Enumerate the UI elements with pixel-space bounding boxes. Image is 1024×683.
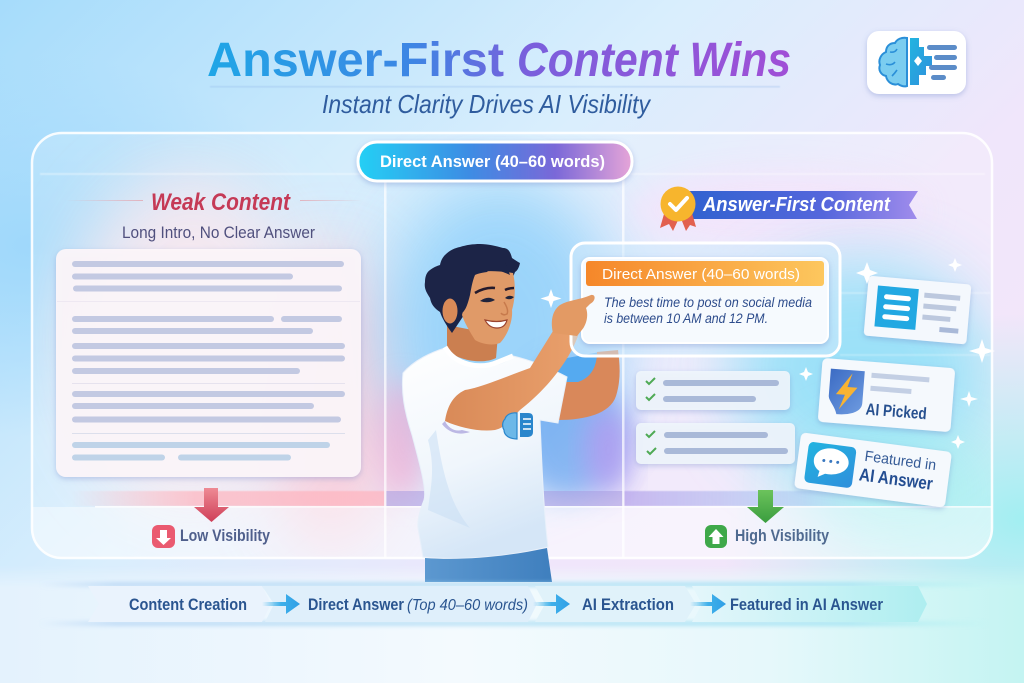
card: featured in AI answer: AI Answer	[858, 464, 934, 494]
arrow one	[262, 594, 300, 614]
shirt logo	[503, 413, 533, 439]
label: high visibility: High Visibility	[735, 526, 829, 545]
icon: high visibility	[705, 525, 727, 548]
direct answer card header: Direct Answer (40–60 words)	[602, 266, 800, 283]
panel: comparison frame	[32, 133, 992, 558]
arrow two	[533, 594, 570, 614]
checklist card two	[636, 423, 795, 464]
title: Content Wins	[517, 34, 791, 87]
direct answer card header	[586, 261, 824, 286]
heading rule left	[65, 200, 143, 201]
step: direct answer: (Top 40–60 words)	[407, 597, 528, 614]
ear	[442, 298, 458, 324]
shirt	[402, 348, 567, 558]
near arm	[445, 331, 579, 431]
heading rule right	[300, 200, 362, 201]
chevrons	[88, 586, 927, 622]
nose	[501, 302, 508, 315]
shirt sleeve shadow	[442, 421, 470, 434]
pill: direct answer	[358, 142, 632, 181]
arrow three	[690, 594, 726, 614]
direct answer text: The best time to post on social media	[604, 295, 812, 310]
step: direct answer: Direct Answer	[308, 595, 404, 614]
card behind hand	[571, 243, 840, 356]
hand	[552, 295, 595, 336]
title: Answer-First	[207, 34, 504, 87]
label: low visibility: Low Visibility	[180, 526, 270, 545]
direct answer text: is between 10 AM and 12 PM.	[604, 311, 768, 326]
title underline	[210, 86, 780, 88]
panel: answer-first content	[540, 186, 995, 548]
eyebrows and eyes	[475, 288, 514, 302]
document card	[56, 249, 361, 477]
document card	[864, 276, 971, 344]
hair	[425, 244, 520, 333]
fringe	[458, 262, 510, 313]
heading: weak content: Weak Content	[151, 189, 291, 216]
jeans	[425, 548, 552, 582]
process flow	[40, 583, 990, 625]
far arm	[558, 350, 620, 420]
ribbon banner: Answer-First Content	[702, 194, 891, 216]
title	[207, 34, 791, 87]
subtitle: Instant Clarity Drives AI Visibility	[322, 89, 652, 119]
pill: direct answer: Direct Answer (40–60 words)	[380, 152, 605, 171]
arrow: down red	[194, 488, 229, 522]
card: AI picked	[818, 358, 955, 432]
icon: brain and document logo	[867, 31, 966, 94]
step: AI extraction: AI Extraction	[582, 595, 674, 614]
neck	[447, 325, 498, 361]
collar	[445, 347, 513, 366]
subheading: long intro: Long Intro, No Clear Answer	[122, 224, 315, 242]
step: direct answer	[308, 595, 528, 614]
ribbon banner	[660, 186, 918, 231]
person pointing	[402, 243, 840, 582]
sparkles	[540, 258, 995, 449]
card: featured in AI answer	[794, 432, 952, 508]
panel: weak content	[56, 189, 362, 548]
card: featured in AI answer: Featured in	[864, 448, 937, 474]
head	[462, 271, 515, 344]
icon: low visibility	[152, 525, 175, 548]
step: featured: Featured in AI Answer	[730, 595, 883, 614]
checklist card one	[636, 371, 790, 410]
direct answer text	[604, 295, 812, 326]
step: content creation: Content Creation	[129, 595, 247, 614]
blue patch behind arm	[545, 352, 600, 382]
arrow: down green	[747, 490, 784, 523]
card: AI picked: AI Picked	[865, 400, 927, 423]
smile	[485, 320, 507, 328]
shirt folds	[428, 430, 470, 528]
